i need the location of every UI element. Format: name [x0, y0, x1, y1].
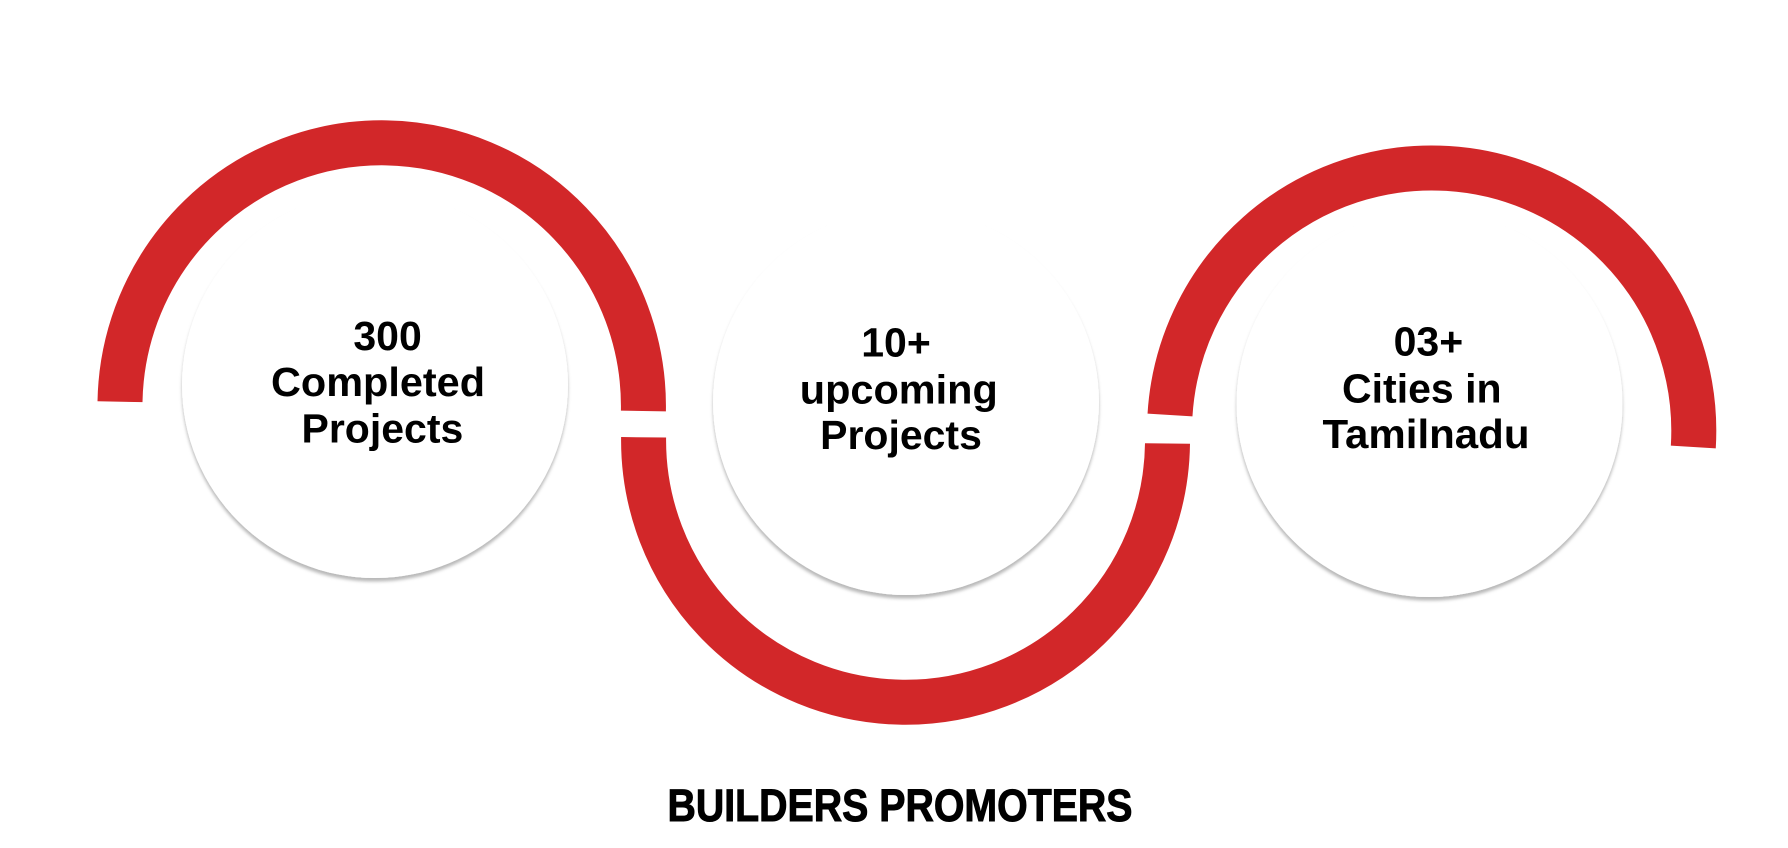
text: 10+ upcoming Projects: 10+ — [861, 320, 931, 366]
text: 300 Completed Projects: 300 — [353, 313, 422, 359]
text: 10+ upcoming Projects — [800, 320, 998, 458]
circle: completed projects — [182, 192, 568, 578]
arc: lower red arc, centre — [644, 437, 1168, 702]
circle: cities in Tamilnadu — [1236, 211, 1622, 597]
text: 300 Completed Projects: Projects — [301, 406, 463, 452]
text: 300 Completed Projects: Completed — [271, 359, 485, 405]
text: 10+ upcoming Projects: Projects — [820, 412, 982, 458]
text: 10+ upcoming Projects: upcoming — [800, 366, 998, 412]
text: 03+ Cities in Tamilnadu — [1322, 319, 1530, 457]
circle: upcoming projects — [713, 209, 1099, 595]
arc: upper red arc, right — [1170, 168, 1694, 447]
text: 03+ Cities in Tamilnadu: 03+ — [1394, 319, 1463, 365]
text: 300 Completed Projects — [271, 313, 485, 452]
arc: upper red arc, left — [120, 143, 643, 411]
panel: cities in Tamilnadu — [1170, 168, 1694, 597]
text: 03+ Cities in Tamilnadu: Tamilnadu — [1322, 411, 1530, 457]
title: BUILDERS PROMOTERS — [668, 780, 1132, 831]
panel: upcoming projects — [644, 209, 1168, 702]
text: 03+ Cities in Tamilnadu: Cities in — [1342, 366, 1502, 412]
panel: completed projects — [120, 143, 643, 578]
